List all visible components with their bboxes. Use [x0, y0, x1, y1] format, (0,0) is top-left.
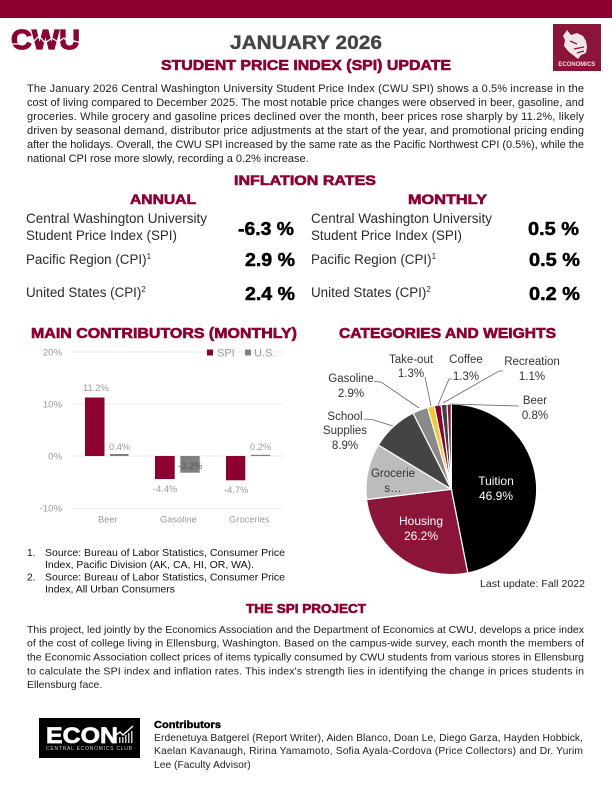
row: US CPI monthly [311, 284, 580, 304]
bar chart: main contributors [40, 348, 283, 524]
labels: Gasoline [328, 373, 374, 385]
labels: Recreation [504, 356, 560, 368]
bars: groceries: Groceries [229, 514, 270, 524]
intro paragraph: driven by seasonal demand, distributor price adjustments at the start of the year, and promotional pricing ending [27, 125, 584, 137]
labels: s… [384, 483, 402, 495]
legend: U.S. [254, 348, 275, 360]
icon: ECON club logo: ECON [46, 723, 118, 748]
labels: 46.9% [479, 489, 513, 503]
project description paragraph: Ellensburg face. [27, 679, 102, 691]
row: Pacific CPI monthly [311, 250, 580, 270]
panel: monthly rates [311, 191, 580, 304]
slice: school supplies [378, 413, 451, 489]
labels: Take-out [389, 354, 434, 366]
project description paragraph [27, 624, 585, 691]
labels: Grocerie [371, 468, 415, 480]
row: US CPI monthly: United States (CPI) [311, 285, 426, 300]
legend [207, 348, 275, 360]
bars: beer [83, 383, 130, 524]
panel: annual rates [26, 191, 295, 304]
heading: the SPI project: THE SPI PROJECT [246, 602, 366, 616]
row: CWU SPI annual [26, 211, 294, 243]
row: US CPI annual: 2.4 % [245, 284, 295, 304]
contributors: Contributors [154, 720, 221, 731]
bar chart: main contributors: 20% [43, 348, 62, 358]
intro paragraph: national CPI rose more slowly, recording a 0.2% increase. [27, 153, 309, 165]
icon: economics wildcat badge: ECONOMICS [558, 62, 595, 68]
heading: main contributors: MAIN CONTRIBUTORS (MONTHLY) [31, 326, 297, 342]
labels: 1.1% [519, 371, 545, 383]
title: JANUARY 2026 [230, 32, 382, 54]
labels: 0.8% [522, 410, 548, 422]
bar chart: main contributors: 10% [43, 400, 62, 410]
subtitle: STUDENT PRICE INDEX (SPI) UPDATE [161, 58, 451, 74]
row: CWU SPI annual: Central Washington University [26, 211, 207, 226]
slice: gasoline [413, 407, 451, 489]
icon: ECON club logo: CENTRAL ECONOMICS CLUB [46, 746, 133, 752]
slice: coffee [434, 405, 451, 489]
footnotes: Source: Bureau of Labor Statistics, Consumer Price [45, 572, 285, 584]
contributors [154, 720, 583, 771]
icon: ECON club logo [39, 718, 140, 758]
labels: Beer [523, 395, 547, 407]
bar chart: main contributors: -10% [40, 504, 62, 514]
row: Pacific CPI annual: 1 [147, 252, 152, 261]
slice: groceries [366, 445, 451, 500]
row: Pacific CPI annual: Pacific Region (CPI) [26, 252, 147, 267]
leader lines [364, 371, 519, 426]
pie chart: categories and weights [323, 354, 560, 575]
project description paragraph: to calculate the SPI index and inflation rates. This index's strength lies in identifying the change in prices students in [27, 665, 584, 677]
bars: beer: 11.2% [83, 383, 109, 393]
contributors: Lee (Faculty Advisor) [154, 760, 251, 771]
intro paragraph [27, 83, 584, 165]
bars: groceries: 0.2% [250, 442, 271, 452]
row: CWU SPI annual: Student Price Index (SPI) [26, 228, 177, 243]
heading: annual: ANNUAL [130, 191, 196, 207]
labels: 1.3% [398, 368, 424, 380]
slice: beer [447, 404, 451, 489]
heading: monthly: MONTHLY [408, 191, 488, 207]
row: CWU SPI monthly: Student Price Index (SPI) [311, 228, 462, 243]
last update note: Last update: Fall 2022 [480, 578, 585, 590]
heading: categories and weights: CATEGORIES AND WEIGHTS [339, 326, 556, 342]
footnotes: Index, All Urban Consumers [45, 584, 175, 596]
contributors: Erdenetuya Batgerel (Report Writer), Aiden Blanco, Doan Le, Diego Garza, Hayden Hobbick, [154, 733, 583, 744]
project description paragraph: This project, led jointly by the Economics Association and the Department of Economics at CWU, develops a price index [27, 624, 585, 636]
slice: take-out [428, 406, 451, 489]
labels: 26.2% [404, 529, 438, 543]
labels: 2.9% [338, 388, 364, 400]
bars: groceries [224, 442, 271, 524]
footnotes: 1. [27, 548, 36, 559]
bars: gasoline [153, 456, 202, 524]
footnotes [27, 548, 285, 596]
labels: Housing [399, 514, 443, 528]
slice: tuition [451, 404, 537, 573]
labels: Supplies [323, 425, 367, 437]
icon: CWU logo: CWU [11, 24, 80, 55]
intro paragraph: The January 2026 Central Washington University Student Price Index (CWU SPI) shows a 0.5% increase in the [27, 83, 584, 95]
row: Pacific CPI monthly: 1 [432, 252, 437, 261]
row: Pacific CPI monthly: 0.5 % [529, 250, 580, 270]
intro paragraph: after the holidays. Overall, the CWU SPI increased by the same rate as the Pacific Northwest CPI (0.5%), while the [27, 139, 584, 151]
labels: 8.9% [332, 440, 358, 452]
bars: gasoline: -4.4% [153, 484, 177, 494]
row: Pacific CPI annual: 2.9 % [245, 250, 295, 270]
row: US CPI annual [26, 284, 295, 304]
labels [323, 354, 560, 543]
contributors: Kaelan Kavanaugh, Ririna Yamamoto, Sofia Ayala-Cordova (Price Collectors) and Dr. Yurim [154, 746, 583, 757]
row: US CPI monthly: 2 [426, 285, 431, 294]
bars: beer: 0.4% [109, 442, 130, 452]
icon: economics wildcat badge [553, 24, 601, 71]
project description paragraph: the Economic Association collect prices of items typically consumed by CWU students from various stores in Ellensburg [27, 652, 584, 664]
row: Pacific CPI annual [26, 250, 295, 270]
intro paragraph: cost of living compared to December 2025. The most notable price changes were observed in beer, gasoline, and [27, 97, 584, 109]
footnotes: Index, Pacific Division (AK, CA, HI, OR, WA). [45, 560, 254, 571]
heading: inflation rates: INFLATION RATES [234, 172, 376, 188]
row: CWU SPI annual: -6.3 % [238, 219, 294, 239]
project description paragraph: of the cost of college living in Ellensburg, Washington. Based on the campus-wide survey, each month the members of [27, 638, 584, 650]
row: CWU SPI monthly [311, 211, 579, 243]
labels: Coffee [449, 354, 483, 366]
row: US CPI annual: United States (CPI) [26, 285, 141, 300]
bars: beer: Beer [98, 514, 118, 524]
labels: 1.3% [453, 371, 479, 383]
legend: SPI [217, 348, 235, 360]
bars: groceries: -4.7% [224, 485, 248, 495]
top banner [0, 0, 612, 18]
row: Pacific CPI monthly: Pacific Region (CPI) [311, 252, 432, 267]
bars: gasoline: Gasoline [160, 514, 197, 524]
footnotes: 2. [27, 572, 36, 584]
row: US CPI monthly: 0.2 % [529, 284, 580, 304]
labels: Tuition [478, 474, 514, 488]
labels: School [327, 411, 363, 423]
row: CWU SPI monthly: 0.5 % [528, 219, 579, 239]
slice: recreation [441, 404, 451, 489]
bar chart: main contributors: 0% [48, 452, 62, 462]
intro paragraph: groceries. While grocery and gasoline prices declined over the month, beer prices rose sharply by 11.2%, likely [27, 111, 584, 123]
footnotes: Source: Bureau of Labor Statistics, Consumer Price [45, 548, 285, 559]
bars: gasoline: -3.2% [178, 461, 202, 471]
row: CWU SPI monthly: Central Washington University [311, 211, 492, 226]
slice: housing [367, 489, 468, 575]
row: US CPI annual: 2 [141, 285, 146, 294]
